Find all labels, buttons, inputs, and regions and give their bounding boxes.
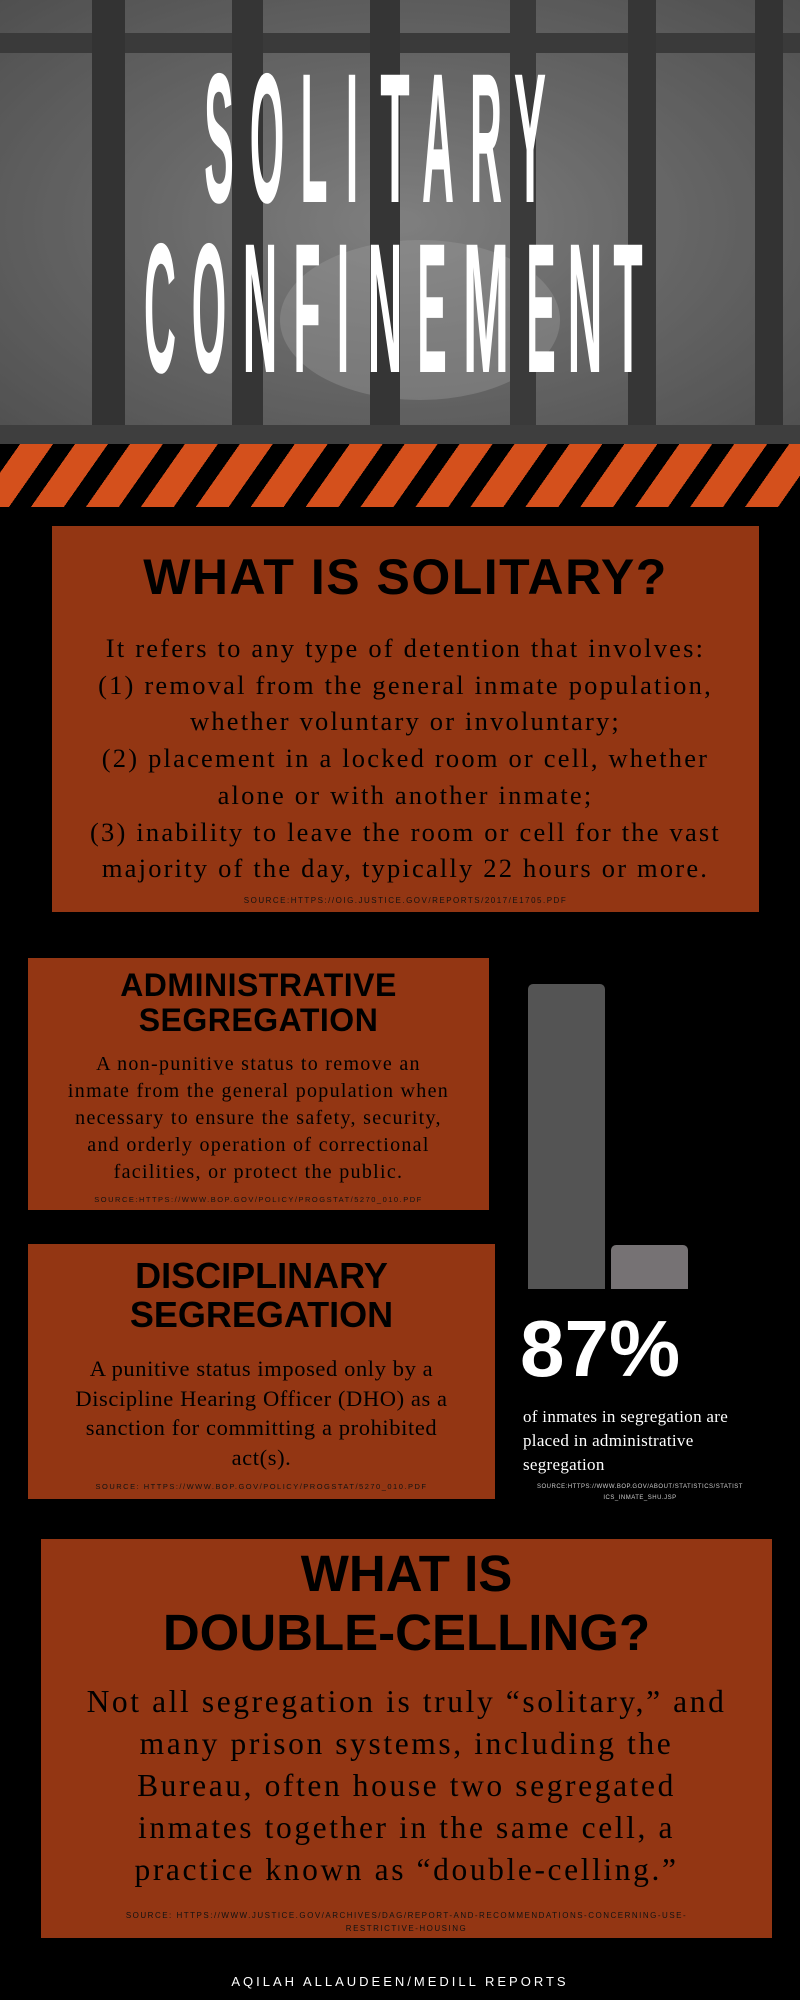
source: SOURCE: HTTPS://WWW.BOP.GOV/POLICY/PROGSTAT/5270_010.PDF <box>96 1482 427 1491</box>
body <box>75 1356 448 1470</box>
title: T <box>380 35 410 242</box>
body text: (1) removal from the general inmate population, <box>98 670 713 700</box>
heading: DISCIPLINARY <box>135 1255 388 1296</box>
title: I <box>337 204 349 412</box>
stat source: ICS_INMATE_SHU.JSP <box>603 1495 677 1501</box>
stat caption <box>523 1407 728 1474</box>
title: A <box>422 34 454 242</box>
source: SOURCE: HTTPS://WWW.JUSTICE.GOV/ARCHIVES/DAG/REPORT-AND-RECOMMENDATIONS-CONCERNING-USE- <box>126 1911 687 1920</box>
hazard stripes <box>0 444 800 507</box>
stat: 87%: 87% <box>520 1304 680 1393</box>
title: F <box>293 204 321 412</box>
heading: WHAT IS <box>301 1545 512 1602</box>
stat caption: placed in administrative <box>523 1431 694 1450</box>
title: C <box>144 204 176 412</box>
heading: SEGREGATION <box>130 1294 393 1335</box>
body: inmates together in the same cell, a <box>138 1810 675 1845</box>
heading: WHAT IS SOLITARY? <box>143 549 668 605</box>
title: O <box>192 204 226 412</box>
panel: what is solitary <box>52 526 759 912</box>
title: E <box>417 204 447 412</box>
body: Bureau, often house two segregated <box>137 1768 676 1803</box>
body: sanction for committing a prohibited <box>86 1415 437 1440</box>
body text: alone or with another inmate; <box>218 780 593 810</box>
title: N <box>243 205 277 412</box>
body: act(s). <box>232 1444 291 1470</box>
stat caption: segregation <box>523 1455 605 1474</box>
stat source: SOURCE:HTTPS://WWW.BOP.GOV/ABOUT/STATISTICS/STATIST <box>537 1484 743 1490</box>
body text: (3) inability to leave the room or cell for the vast <box>90 817 721 847</box>
body text: majority of the day, typically 22 hours or more. <box>102 853 709 883</box>
stat caption: of inmates in segregation are <box>523 1407 728 1426</box>
title: I <box>346 34 358 242</box>
title: M <box>463 204 509 411</box>
body: Discipline Hearing Officer (DHO) as a <box>75 1386 448 1410</box>
title: L <box>300 34 328 242</box>
footer credit: AQILAH ALLAUDEEN/MEDILL REPORTS <box>231 1974 569 1989</box>
stat source <box>537 1484 743 1501</box>
bar chart <box>528 984 688 1289</box>
body: A non-punitive status to remove an <box>96 1053 421 1075</box>
body: and orderly operation of correctional <box>87 1134 430 1156</box>
source: SOURCE:HTTPS://WWW.BOP.GOV/POLICY/PROGSTAT/5270_010.PDF <box>94 1195 423 1204</box>
title: N <box>568 205 602 412</box>
heading: DOUBLE-CELLING? <box>163 1604 650 1661</box>
heading: ADMINISTRATIVE <box>120 967 397 1003</box>
body text <box>90 633 721 883</box>
panel: disciplinary segregation <box>28 1244 495 1499</box>
title: Y <box>514 35 546 242</box>
body text: whether voluntary or involuntary; <box>190 706 621 736</box>
source: RESTRICTIVE-HOUSING <box>346 1924 467 1933</box>
body: many prison systems, including the <box>140 1726 673 1761</box>
body: practice known as “double-celling.” <box>134 1852 679 1887</box>
body: Not all segregation is truly “solitary,” and <box>87 1684 726 1719</box>
title: O <box>250 34 284 242</box>
body <box>87 1684 726 1887</box>
body: facilities, or protect the public. <box>114 1161 403 1183</box>
heading <box>130 1255 393 1335</box>
panel: double-celling <box>41 1539 772 1938</box>
title: S <box>204 34 234 242</box>
body text: It refers to any type of detention that involves: <box>106 633 705 663</box>
bar: disciplinary <box>611 1245 688 1289</box>
bar: administrative <box>528 984 605 1289</box>
title: T <box>613 205 643 412</box>
body: A punitive status imposed only by a <box>90 1356 433 1381</box>
source <box>126 1911 687 1933</box>
heading: SEGREGATION <box>139 1002 378 1038</box>
panel: administrative segregation <box>28 958 489 1210</box>
heading <box>163 1545 650 1661</box>
body <box>68 1053 449 1183</box>
title: N <box>368 205 402 412</box>
source: SOURCE:HTTPS://OIG.JUSTICE.GOV/REPORTS/2017/E1705.PDF <box>244 896 567 905</box>
title: R <box>470 34 502 242</box>
body text: (2) placement in a locked room or cell, whether <box>102 743 709 773</box>
title <box>144 34 643 412</box>
header photo <box>0 0 800 444</box>
body: inmate from the general population when <box>68 1080 449 1102</box>
title: E <box>526 204 556 412</box>
heading <box>120 967 397 1038</box>
body: necessary to ensure the safety, security, <box>75 1107 442 1129</box>
